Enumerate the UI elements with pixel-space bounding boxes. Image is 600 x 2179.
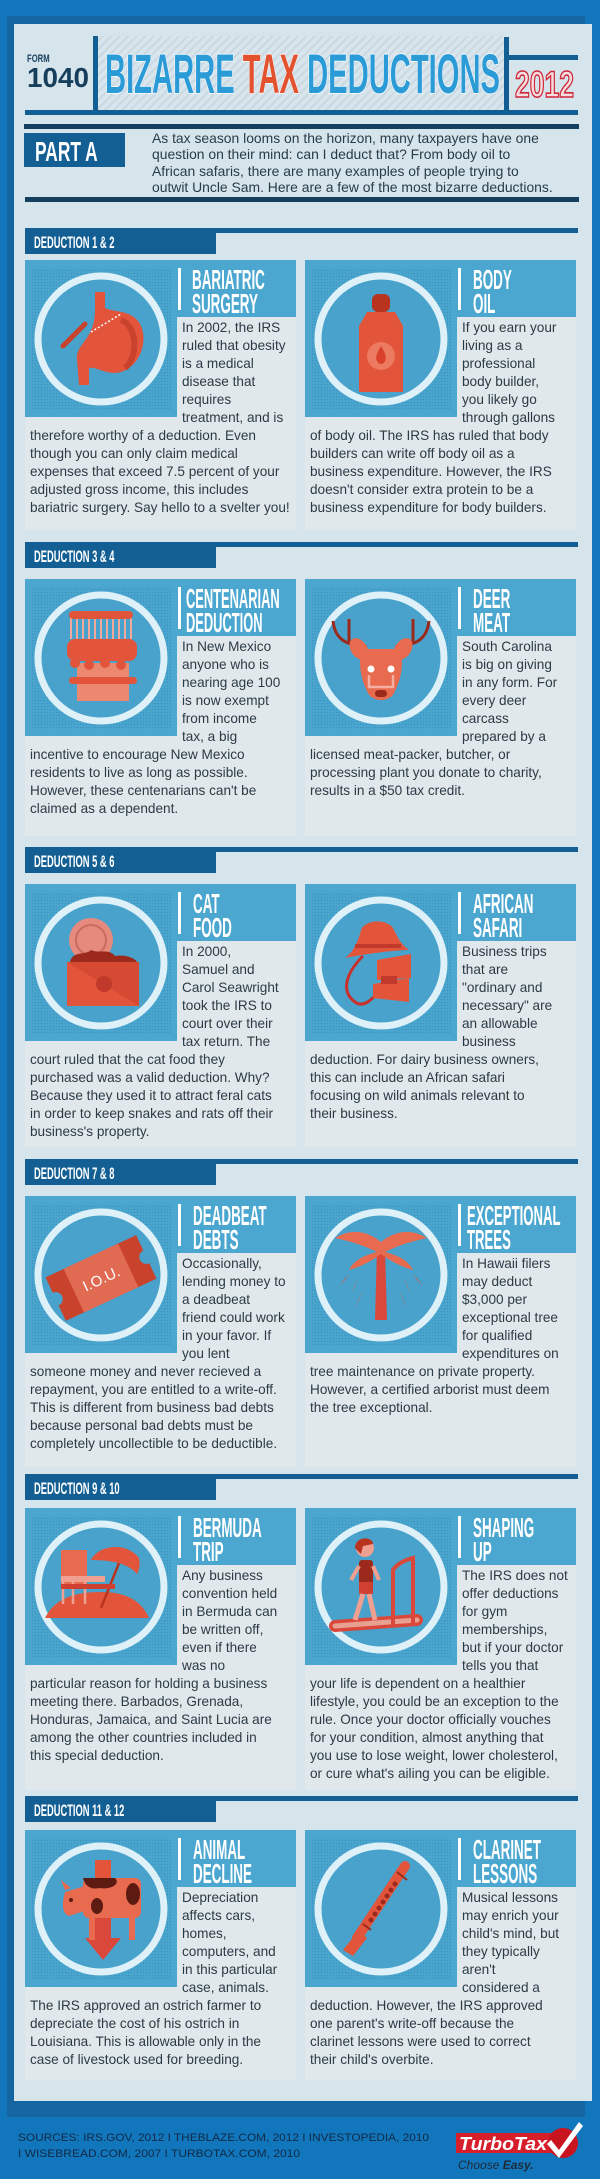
title: african safari <box>457 884 576 941</box>
logo: TurboTax: TurboTax <box>459 2134 548 2154</box>
text: bariatric surgery <box>30 320 290 515</box>
text: exceptional trees: In Hawaii filers may deduct $3,000 per exceptional tree for qualified expenditures on <box>462 1256 559 1361</box>
title: bermuda trip <box>177 1508 296 1565</box>
text: african safari: deduction. For dairy business owners, this can include an African safari focusing on wild animals relevant to their business. <box>310 1052 539 1121</box>
text: cat food <box>30 944 279 1139</box>
text: bariatric surgery: In 2002, the IRS ruled that obesity is a medical disease that requires treatment, and is <box>182 320 286 425</box>
text: body oil: If you earn your living as a professional body builder, you likely go through gallons <box>462 320 556 425</box>
section header: deduction 11 & 12: DEDUCTION 11 & 12 <box>34 1801 125 1820</box>
text: bermuda trip: Any business convention held in Bermuda can be written off, even if there was no <box>182 1568 277 1673</box>
icon: oil bottle <box>305 260 457 417</box>
text: body oil <box>310 320 556 515</box>
title: animal decline: ANIMAL <box>193 1834 245 1865</box>
text: animal decline: The IRS approved an ostrich farmer to depreciate the cost of his ostrich in Louisiana. This is allowable only in the case of livestock used for breeding. <box>30 1998 261 2067</box>
icon: cat food box <box>25 884 177 1041</box>
text: centenarian deduction <box>30 639 280 816</box>
icon: safari hat and binoculars <box>305 884 457 1041</box>
text: exceptional trees: tree maintenance on private property. However, a certified arborist must deem the tree exceptional. <box>310 1364 550 1415</box>
title: centenarian deduction: CENTENARIAN <box>186 582 280 614</box>
title: exceptional trees: EXCEPTIONAL <box>467 1199 561 1231</box>
title: cat food: CAT <box>193 888 220 919</box>
card: bariatric surgery <box>25 260 296 530</box>
text: bermuda trip <box>30 1568 277 1763</box>
title: african safari: AFRICAN <box>473 888 533 919</box>
card: deer meat <box>305 579 576 836</box>
text: cat food: court ruled that the cat food they purchased was a valid deduction. Why? Because they used it to attract feral cats in order to keep snakes and rats off their business's property. <box>30 1052 273 1139</box>
section header: deduction 3 & 4: DEDUCTION 3 & 4 <box>34 547 115 566</box>
card: deadbeat debts <box>25 1196 296 1467</box>
text: bermuda trip: particular reason for holding a business meeting there. Barbados, Grenada, Honduras, Jamaica, and Saint Lucia are among the other countries included in this special deduction. <box>30 1676 272 1763</box>
icon: stomach <box>25 260 177 417</box>
title: deadbeat debts <box>177 1196 296 1253</box>
sources <box>18 2132 429 2160</box>
card: cat food <box>25 884 296 1147</box>
text: animal decline: Depreciation affects cars, homes, computers, and in this particular case, animals. <box>182 1890 277 1995</box>
text: shaping up <box>310 1568 568 1781</box>
section header: deduction 11 & 12 <box>25 1796 578 1822</box>
section header: deduction 5 & 6 <box>25 847 578 873</box>
title: bariatric surgery <box>177 260 296 317</box>
text: centenarian deduction: In New Mexico anyone who is nearing age 100 is now exempt from income tax, a big <box>182 639 280 744</box>
text: deer meat: licensed meat-packer, butcher, or processing plant you donate to charity, results in a $50 tax credit. <box>310 747 542 798</box>
text: animal decline <box>30 1890 277 2067</box>
section header: deduction 5 & 6: DEDUCTION 5 & 6 <box>34 852 115 871</box>
section header: deduction 7 & 8: DEDUCTION 7 & 8 <box>34 1164 115 1183</box>
title: animal decline <box>177 1830 296 1887</box>
text: shaping up: The IRS does not offer deductions for gym memberships, but if your doctor tells you that <box>462 1568 568 1673</box>
text: deer meat: South Carolina is big on giving in any form. For every deer carcass prepared by a <box>462 639 557 744</box>
title: clarinet lessons: CLARINET <box>473 1834 541 1865</box>
text: clarinet lessons <box>310 1890 559 2067</box>
title: body oil <box>457 260 576 317</box>
title: shaping up: SHAPING <box>473 1512 534 1543</box>
title: bariatric surgery: BARIATRIC <box>192 264 265 295</box>
logo: TurboTax: Choose Easy. <box>458 2158 534 2172</box>
text: deadbeat debts: someone money and never recieved a repayment, you are entitled to a write-off. This is different from business bad debts because personal bad debts must be completely uncollectible to be deductible. <box>30 1364 277 1451</box>
section header: deduction 1 & 2: DEDUCTION 1 & 2 <box>34 233 115 252</box>
icon: cow with down arrow <box>25 1830 177 1987</box>
title: deer meat: DEER <box>473 583 510 614</box>
title: centenarian deduction <box>177 579 296 636</box>
card: animal decline <box>25 1830 296 2080</box>
card: body oil <box>305 260 576 530</box>
title: cat food <box>177 884 296 941</box>
title: shaping up <box>457 1508 576 1565</box>
title: clarinet lessons <box>457 1830 576 1887</box>
icon: palm tree <box>305 1196 457 1353</box>
logo: TurboTax <box>456 2122 583 2172</box>
icon: birthday cake <box>25 579 177 736</box>
sources: SOURCES: IRS.GOV, 2012 I THEBLAZE.COM, 2012 I INVESTOPEDIA, 2010 <box>18 2132 429 2144</box>
title: exceptional trees <box>457 1196 576 1253</box>
part A label <box>24 133 125 167</box>
text: exceptional trees <box>310 1256 559 1415</box>
text: african safari <box>310 944 552 1121</box>
text: body oil: of body oil. The IRS has ruled that body builders can write off body oil as a business expenditure. However, the IRS doesn't consider extra protein to be a business expenditure for body builders. <box>310 428 552 515</box>
card: centenarian deduction <box>25 579 296 836</box>
text: clarinet lessons: deduction. However, the IRS approved one parent's write-off because the clarinet lessons were used to correct their child's overbite. <box>310 1998 543 2067</box>
title: body oil: BODY <box>473 264 512 295</box>
intro text: As tax season looms on the horizon, many taxpayers have one question on their mind: can I deduct that? From body oil to African safaris, there are many examples of people trying to outwit Uncle Sam. Here are a few of the most bizarre deductions. <box>152 130 553 195</box>
text: african safari: Business trips that are "ordinary and necessary" are an allowable business <box>462 944 552 1049</box>
title: deadbeat debts: DEADBEAT <box>193 1200 267 1231</box>
text: centenarian deduction: incentive to encourage New Mexico residents to live as long as possible. However, these centenarians can't be claimed as a dependent. <box>30 747 256 816</box>
section header: deduction 3 & 4 <box>25 542 578 568</box>
icon: deer head <box>305 579 457 736</box>
icon: clarinet <box>305 1830 457 1987</box>
text: cat food: In 2000, Samuel and Carol Seawright took the IRS to court over their tax return. The <box>182 944 279 1049</box>
card: african safari <box>305 884 576 1147</box>
text: deadbeat debts <box>30 1256 286 1451</box>
sources: I WISEBREAD.COM, 2007 I TURBOTAX.COM, 2010 <box>18 2148 300 2160</box>
card: bermuda trip <box>25 1508 296 1790</box>
title: deer meat <box>457 579 576 636</box>
part A label: PART A <box>35 136 98 167</box>
icon: IOU ticket: I.O.U. <box>80 1263 123 1295</box>
text: deadbeat debts: Occasionally, lending money to a deadbeat friend could work in your favor. If you lent <box>182 1256 286 1361</box>
title: bermuda trip: BERMUDA <box>193 1512 262 1543</box>
text: clarinet lessons: Musical lessons may enrich your child's mind, but they typically aren't considered a <box>462 1890 559 1995</box>
icon: IOU ticket <box>25 1196 177 1353</box>
part A intro <box>24 124 579 202</box>
card: clarinet lessons <box>305 1830 576 2080</box>
section header: deduction 9 & 10: DEDUCTION 9 & 10 <box>34 1479 120 1498</box>
section header: deduction 9 & 10 <box>25 1474 578 1500</box>
text: shaping up: your life is dependent on a healthier lifestyle, you could be an exception to the rule. Once your doctor officially vouches for your condition, almost anything that you use to lose weight, lower cholesterol, or cure what's ailing you can be eligible. <box>310 1676 559 1781</box>
icon: beach chair and umbrella <box>25 1508 177 1665</box>
text: deer meat <box>310 639 557 798</box>
card: exceptional trees <box>305 1196 576 1467</box>
section header: deduction 7 & 8 <box>25 1159 578 1185</box>
icon: person on treadmill <box>305 1508 457 1665</box>
text: bariatric surgery: therefore worthy of a deduction. Even though you can only claim medical expenses that exceed 7.5 percent of your adjusted gross income, this includes bariatric surgery. Say hello to a svelter you! <box>30 428 290 515</box>
section header: deduction 1 & 2 <box>25 228 578 254</box>
card: shaping up <box>305 1508 576 1790</box>
header <box>27 36 574 110</box>
